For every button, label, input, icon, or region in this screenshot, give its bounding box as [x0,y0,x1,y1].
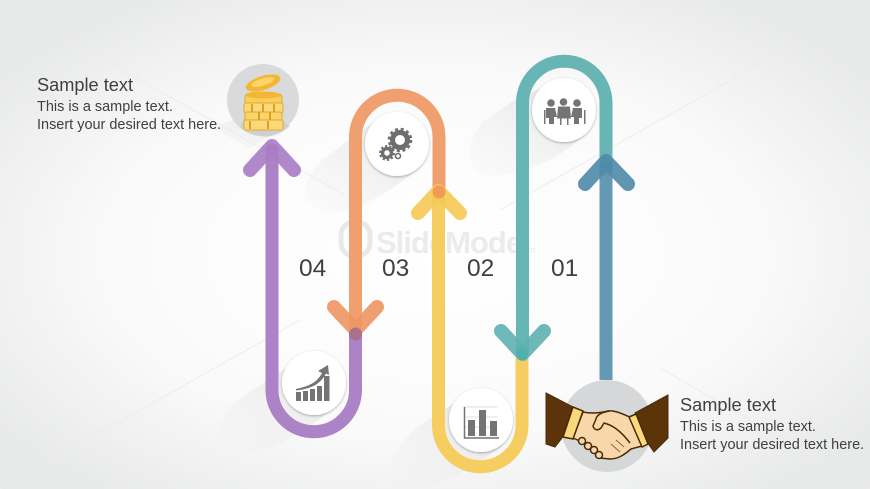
path 02: yellow loop with up arrow [418,191,522,467]
text block: bottom right [680,419,864,453]
icon: bar chart badge [449,388,513,452]
heading: top left: Sample text [37,75,133,95]
path 04: purple loop [250,146,356,432]
orange end over yellow arrow [432,186,446,198]
left cuff [563,407,583,439]
text block: bottom right: This is a sample text. [680,419,816,435]
label 04: 04 [299,255,326,282]
icon: coins badge [227,64,299,137]
right cuff [629,414,648,447]
left sleeve [546,393,573,447]
hands [573,411,642,459]
yellow end over teal arrow [516,348,528,360]
start arrow: blue up [585,161,628,380]
label 02: 02 [467,255,494,282]
label 03: 03 [382,255,409,282]
text block: top left [37,99,221,133]
path 03: orange loop with down arrow [334,95,439,330]
icon: meeting badge [532,78,596,142]
purple end over orange arrow [349,328,362,340]
icon: handshake [546,380,668,472]
icon: growth chart badge [282,351,346,415]
watermark: SlideModel [376,225,530,260]
right sleeve [635,395,668,452]
heading: bottom right: Sample text [680,395,776,415]
text block: top left: Insert your desired text here. [37,117,221,133]
long shadows [212,88,587,489]
icon: gears badge [365,112,429,176]
text block: top left: This is a sample text. [37,99,173,115]
label 01: 01 [551,255,578,282]
path 01: teal loop with down arrow [501,61,606,354]
arrow 04: purple up [250,146,294,170]
watermark: .com [516,245,536,255]
text block: bottom right: Insert your desired text here. [680,437,864,453]
